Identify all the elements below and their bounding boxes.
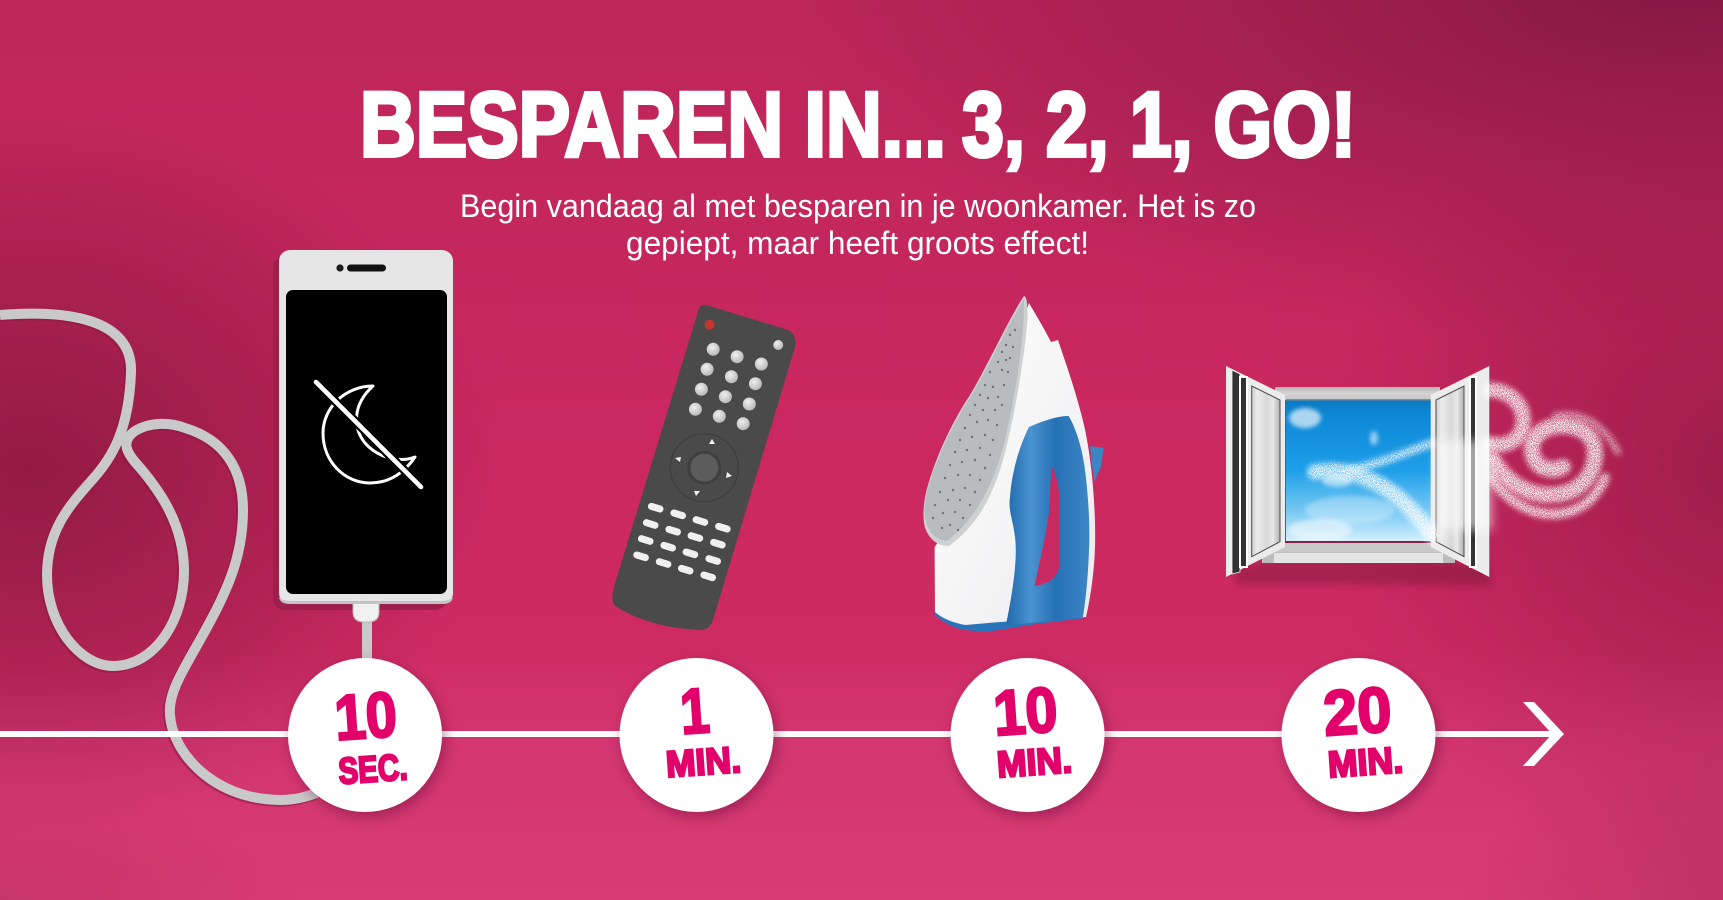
number buttons <box>689 340 783 430</box>
timeline arrow <box>0 702 1564 766</box>
timeline marker: 10 min: MIN. <box>996 739 1073 785</box>
left shutter <box>1226 366 1285 577</box>
title: 3, 2, 1, GO! <box>962 74 1356 176</box>
subtitle: Begin vandaag al met besparen in je woonkamer. Het is zo <box>460 188 1256 224</box>
title: BESPAREN IN... <box>360 74 946 176</box>
phone <box>273 250 453 665</box>
timeline marker: 20 min <box>1282 658 1436 812</box>
sole holes <box>933 330 1015 530</box>
LED <box>705 320 715 330</box>
timeline marker: 20 min: MIN. <box>1327 739 1404 785</box>
function buttons <box>632 502 732 582</box>
timeline marker: 20 min: 20 <box>1321 673 1394 750</box>
window with wind swirl <box>1226 366 1618 585</box>
timeline marker: 1 min <box>620 658 774 812</box>
right shutter <box>1431 366 1489 577</box>
blue handle <box>1006 416 1089 625</box>
iron <box>924 296 1104 632</box>
wind stream <box>1315 440 1492 535</box>
timeline marker: 10 sec <box>288 658 442 812</box>
icon: night mode off <box>316 382 421 487</box>
sky <box>1286 399 1432 542</box>
wind swirl <box>1490 390 1618 514</box>
timeline marker: 1 min: MIN. <box>665 739 742 785</box>
handle opening <box>1035 467 1060 586</box>
white body <box>935 303 1095 625</box>
remote control <box>612 305 795 630</box>
window shadow <box>1235 560 1490 585</box>
window frame <box>1275 387 1440 400</box>
subtitle <box>460 188 1256 261</box>
timeline marker: 10 sec: 10 <box>332 678 399 754</box>
timeline marker: 10 min <box>950 658 1104 812</box>
charging cable <box>0 314 317 802</box>
back strap <box>1090 446 1104 482</box>
blue base <box>935 605 1085 632</box>
d-pad <box>670 434 738 502</box>
timeline marker: 10 sec: SEC. <box>337 746 409 792</box>
soleplate <box>924 296 1028 546</box>
timeline marker: 1 min: 1 <box>678 674 712 748</box>
subtitle: gepiept, maar heeft groots effect! <box>626 225 1089 261</box>
timeline marker: 10 min: 10 <box>991 673 1060 749</box>
